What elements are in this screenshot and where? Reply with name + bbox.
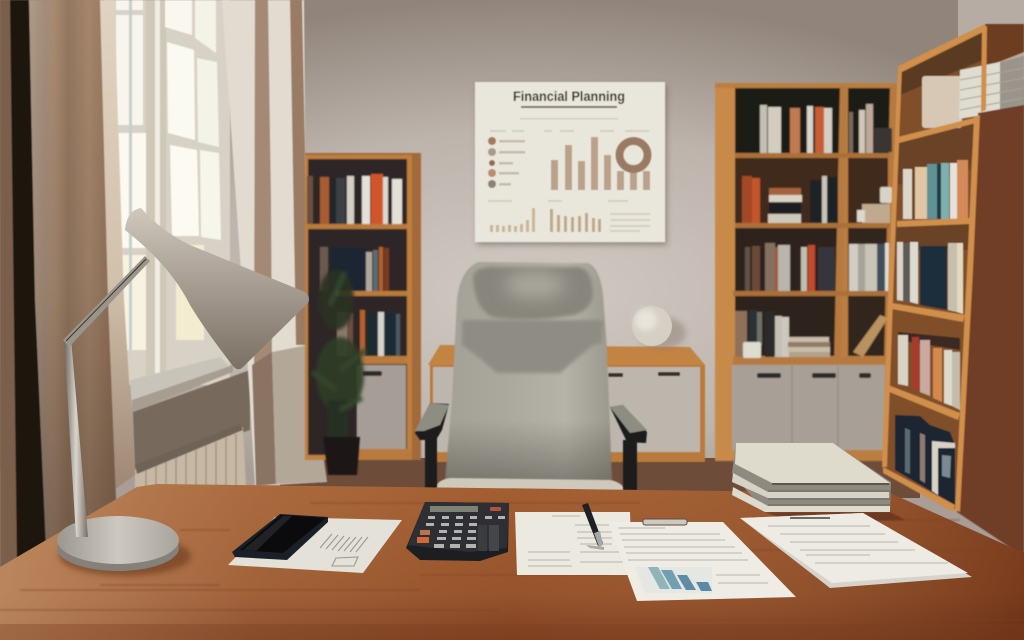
books: top row — [760, 104, 892, 153]
poster donut chart — [620, 141, 648, 169]
right curtain — [222, 0, 327, 486]
chair backrest — [445, 262, 612, 482]
back wall — [0, 0, 1024, 470]
lower cabinet door — [357, 365, 406, 449]
office chair — [415, 262, 647, 492]
lamp pole — [64, 338, 88, 537]
bookshelf: left — [305, 153, 421, 460]
chair headrest highlight — [505, 271, 565, 299]
bookshelf: centre right — [715, 83, 897, 461]
potted plant — [312, 270, 366, 475]
books: fifth shelf — [895, 415, 955, 505]
pen — [582, 503, 604, 550]
side panel — [957, 105, 1024, 552]
books: second row — [742, 176, 892, 223]
document with bar chart — [608, 519, 796, 601]
sheet under phone — [228, 517, 402, 573]
books: second shelf — [903, 160, 968, 219]
books: third row — [745, 243, 889, 291]
radiator — [135, 424, 246, 488]
calculator keys — [417, 516, 505, 551]
phone — [232, 514, 328, 560]
poster bar chart — [551, 137, 650, 190]
stack of papers — [732, 443, 891, 512]
mini bar chart — [635, 567, 712, 593]
calculator — [406, 502, 509, 561]
shelf boards — [882, 24, 987, 512]
clip — [643, 519, 687, 525]
chair upper panel and seam — [462, 320, 603, 373]
phone and note sheet — [228, 514, 402, 573]
books: shelf row 1 — [307, 174, 402, 224]
poster title: Financial Planning — [513, 89, 625, 104]
lamp — [57, 208, 309, 576]
desk — [0, 484, 1024, 640]
books: fourth row — [735, 310, 888, 358]
books: shelf row 3 — [337, 310, 400, 356]
lamp arm — [63, 256, 150, 347]
decorative sphere — [632, 306, 686, 349]
shadow under stack — [765, 512, 905, 522]
poster lower left bars — [490, 208, 535, 232]
wood grain — [0, 503, 1024, 620]
wall poster: financial planning charts — [475, 82, 667, 245]
top right wood piece — [983, 24, 1024, 68]
lamp shade — [125, 208, 309, 369]
low cabinet — [428, 345, 705, 462]
poster legend — [488, 137, 525, 188]
poster lower centre bars — [550, 209, 601, 232]
bookshelf: right, perspective — [882, 24, 1024, 552]
top shelf box and paper stack — [922, 56, 1024, 128]
chair left armrest — [415, 403, 449, 488]
books: shelf row 2 — [320, 247, 389, 291]
document with pen — [515, 503, 632, 575]
books: fourth shelf — [898, 332, 960, 410]
window with frames — [105, 0, 250, 468]
shelf carcass interior — [883, 25, 985, 510]
chair right armrest — [610, 405, 647, 492]
lamp base — [57, 516, 191, 576]
poster text lines — [488, 118, 650, 232]
books: third shelf — [897, 242, 963, 314]
loose form document — [740, 513, 972, 588]
chair headrest — [473, 267, 593, 320]
left curtain — [0, 0, 135, 570]
floor — [280, 458, 920, 498]
chair seat — [435, 478, 627, 492]
